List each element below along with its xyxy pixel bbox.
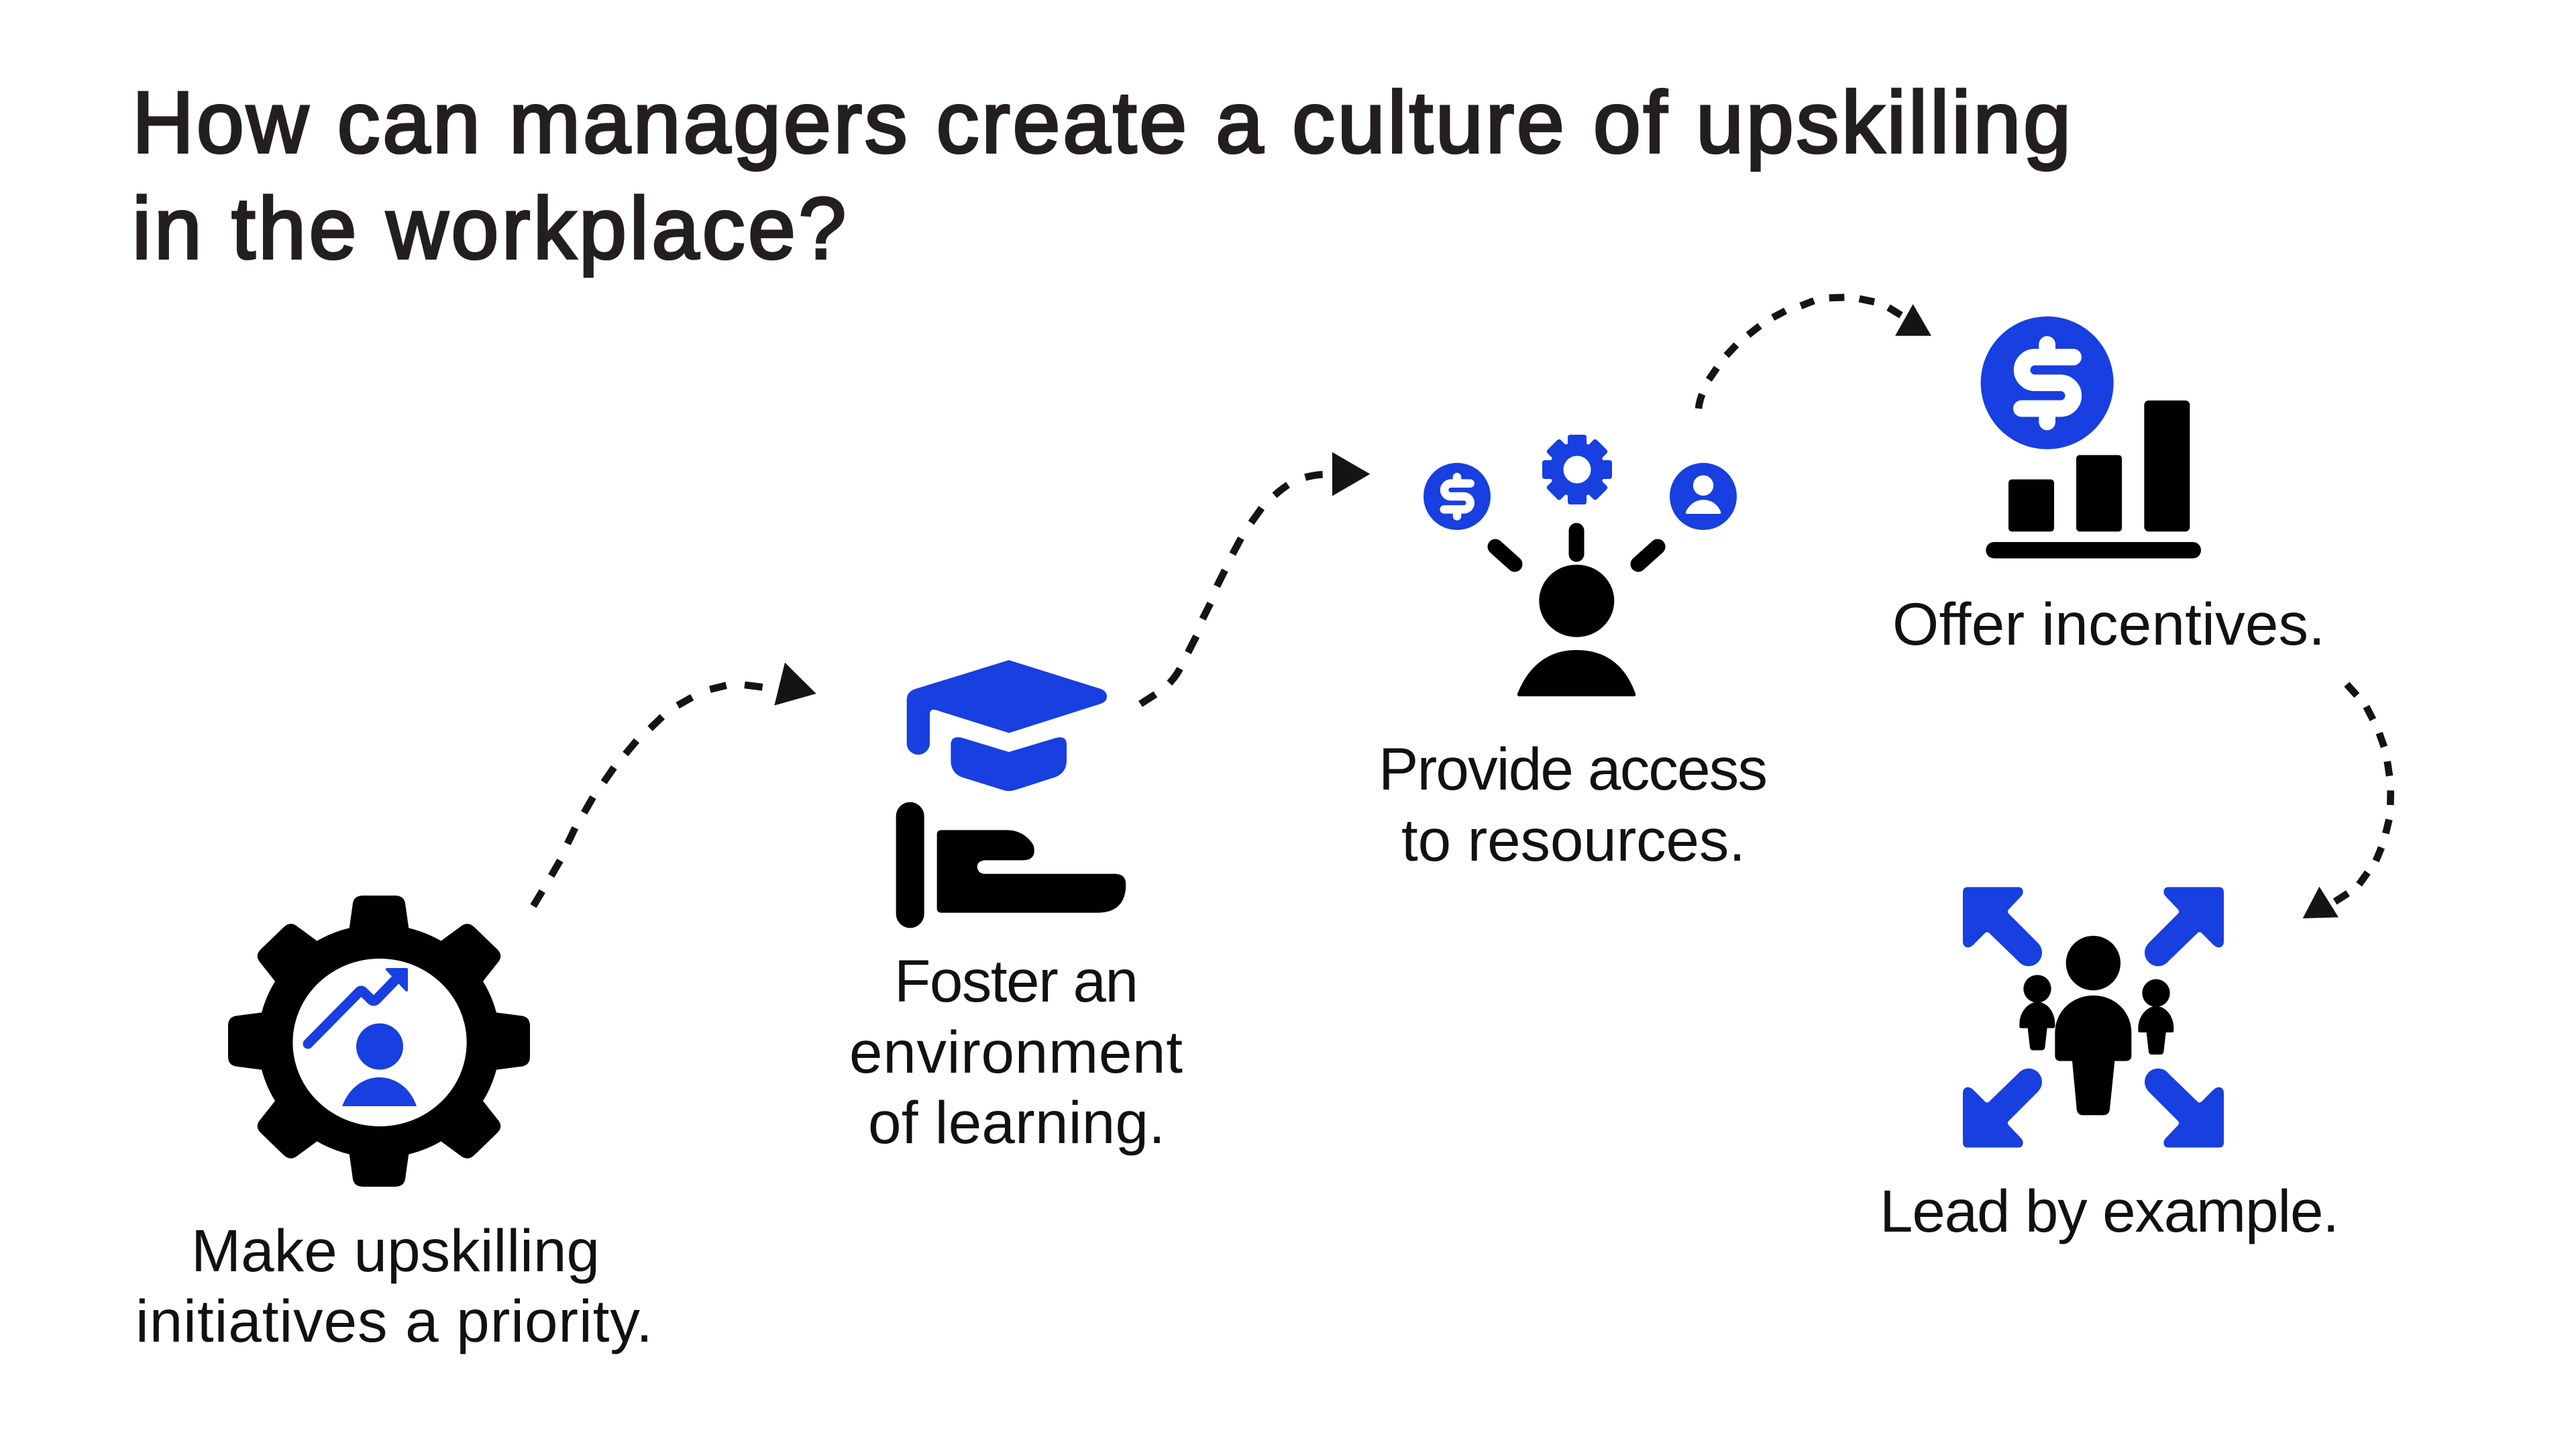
label: to resources. xyxy=(1401,806,1746,873)
label: Provide access xyxy=(1379,735,1768,802)
step 5: lead by example xyxy=(1880,887,2339,1244)
label xyxy=(136,1217,653,1354)
title xyxy=(132,74,2071,277)
step 2: foster an environment of learning xyxy=(849,660,1183,1156)
label: environment xyxy=(849,1018,1183,1085)
arrow: step 4 to step 5 xyxy=(2303,684,2391,918)
label: Offer incentives. xyxy=(1892,590,2325,657)
step 1: make upskilling a priority xyxy=(136,896,653,1354)
label: of learning. xyxy=(868,1089,1165,1156)
title: How can managers create a culture of upskilling xyxy=(132,74,2071,171)
step 4: offer incentives xyxy=(1892,317,2325,657)
label xyxy=(849,947,1183,1156)
icon: person xyxy=(1517,565,1635,696)
arrow: step 3 to step 4 xyxy=(1699,297,1931,409)
icon: people with outward arrows xyxy=(1963,887,2224,1148)
arrow: step 1 to step 2 xyxy=(533,663,816,906)
arrow: step 2 to step 3 xyxy=(1140,452,1370,704)
icon: gear with person and rising arrow xyxy=(228,896,530,1187)
icon: graduation cap over hand xyxy=(896,660,1126,928)
icon: small gear xyxy=(1542,435,1612,504)
label xyxy=(1379,735,1768,873)
icon: dollar coin xyxy=(1424,463,1491,530)
rays xyxy=(1495,531,1658,564)
icon: dollar coin with bar chart xyxy=(1981,317,2201,558)
label: Foster an xyxy=(894,947,1138,1014)
label: Lead by example. xyxy=(1880,1177,2339,1244)
step 3: provide access to resources xyxy=(1379,435,1768,873)
icon: person coin xyxy=(1670,463,1737,530)
icon: person with resources xyxy=(1424,435,1737,696)
title: in the workplace? xyxy=(132,180,846,277)
label: Make upskilling xyxy=(191,1217,600,1284)
label: initiatives a priority. xyxy=(136,1287,653,1354)
